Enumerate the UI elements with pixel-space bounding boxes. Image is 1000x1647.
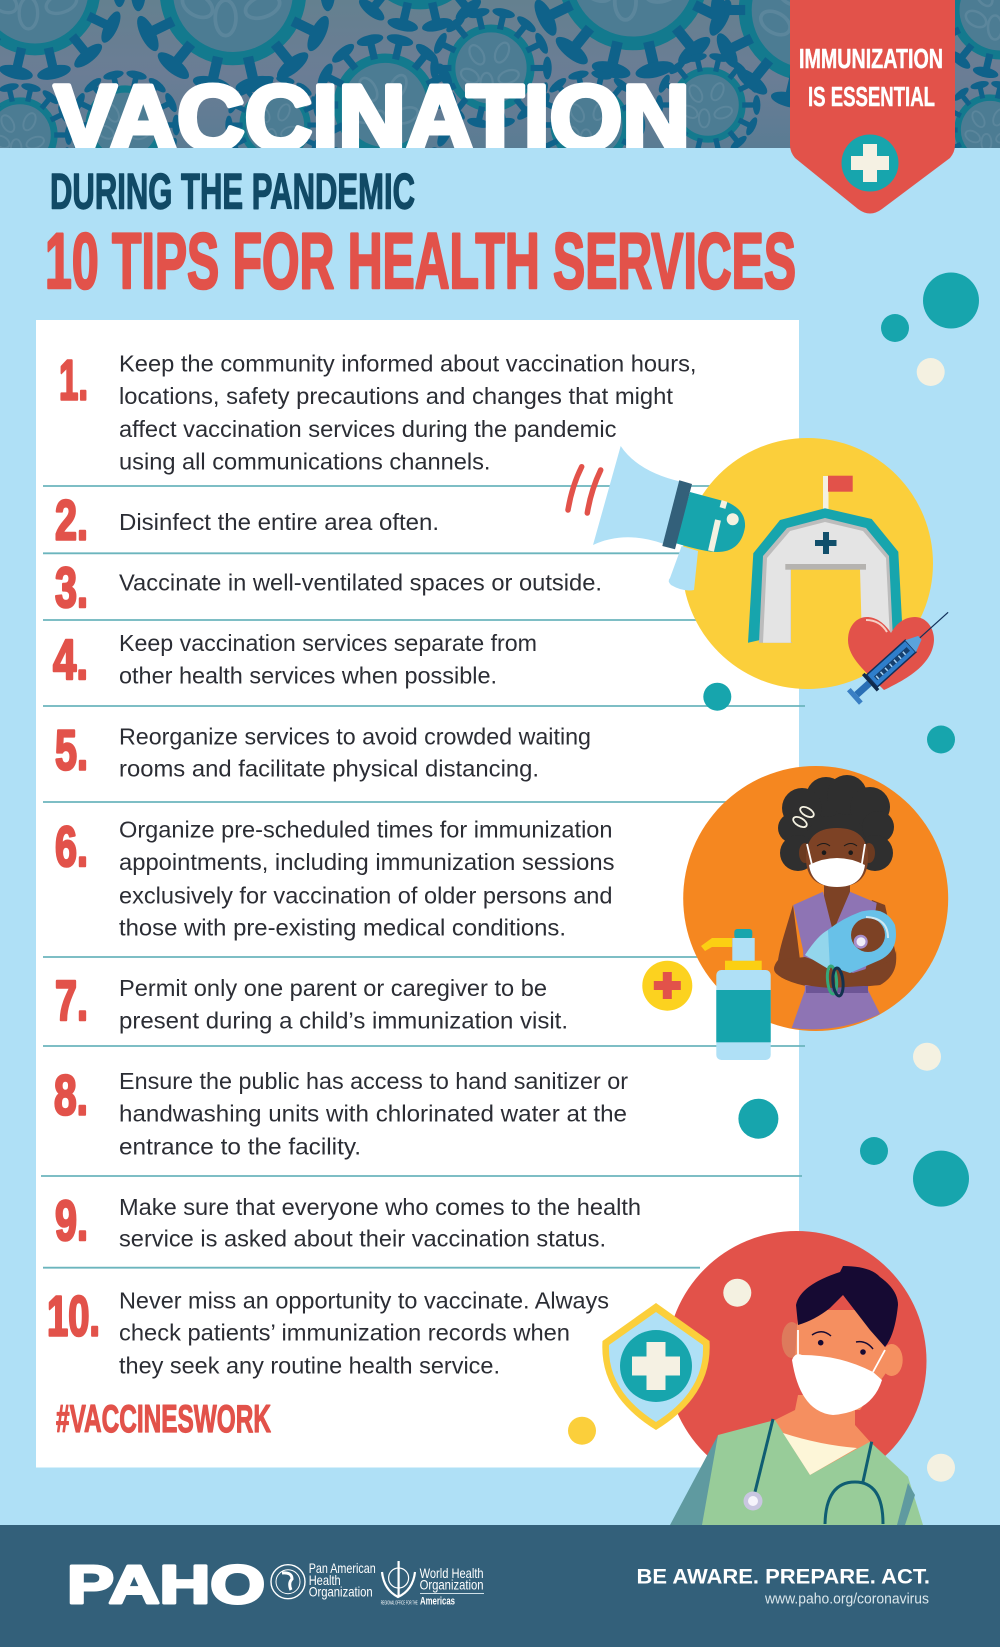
tip 5: rooms and facilitate physical distancing. [119, 756, 539, 782]
tip 8: 8. [54, 1064, 88, 1128]
tip 2: Disinfect the entire area often. [119, 509, 439, 535]
header band: virus pattern [0, 0, 1000, 148]
tip 7: present during a child’s immunization visit. [119, 1007, 568, 1033]
tip 1: affect vaccination services during the pandemic [119, 416, 616, 442]
tip 6: exclusively for vaccination of older persons and [119, 882, 612, 908]
tip 4: 4. [53, 628, 88, 692]
subtitle: during the pandemic: DURING THE PANDEMIC [50, 164, 415, 220]
illustration: field hospital on yellow circle [568, 438, 955, 706]
tip 10: check patients’ immunization records when [119, 1320, 570, 1346]
logo: WHO emblem [382, 1561, 415, 1597]
tip 1: using all communications channels. [119, 449, 490, 475]
title: vaccination: VACCINATION [54, 67, 690, 169]
icon: shield [602, 1303, 710, 1430]
icon: syringe [846, 604, 955, 706]
tip 6 [55, 815, 614, 941]
icon: tent building [748, 508, 903, 643]
tip 10: 10. [47, 1284, 100, 1348]
tip 4: other health services when possible. [119, 662, 497, 688]
tip 9 [55, 1189, 641, 1253]
text: Pan American Health Organization: Organization [309, 1584, 373, 1600]
face [799, 843, 811, 863]
ribbon badge: immunization is essential: IS ESSENTIAL [808, 81, 935, 112]
footer band [0, 1525, 1000, 1647]
tip 10: Never miss an opportunity to vaccinate. Always [119, 1287, 609, 1313]
panel: tips list [36, 320, 805, 1468]
mask [809, 858, 865, 887]
tip 3: 3. [55, 556, 88, 620]
decorative dots [703, 272, 979, 1207]
baby [805, 910, 896, 973]
tip 4: Keep vaccination services separate from [119, 630, 537, 656]
icon: hand sanitizer [701, 929, 771, 1060]
tip 7: 7. [55, 969, 88, 1033]
icon: plus badge [642, 961, 692, 1011]
logo: PAHO emblem [271, 1565, 305, 1599]
woman [774, 775, 896, 1029]
text: Pan American Health Organization: Pan American [309, 1560, 376, 1576]
tip 7: Permit only one parent or caregiver to be [119, 975, 547, 1001]
tip 5: 5. [55, 718, 88, 782]
text: Pan American Health Organization: Health [309, 1572, 341, 1588]
tip 1 [59, 348, 696, 475]
text: slogan: BE AWARE. PREPARE. ACT. [636, 1566, 930, 1588]
tip 5 [55, 718, 591, 782]
tip 1: 1. [59, 348, 88, 412]
tip 10: they seek any routine health service. [119, 1352, 500, 1378]
nurse [670, 1266, 923, 1525]
text: World Health Organization Americas: REGIONAL OFFICE FOR THE [381, 1600, 418, 1606]
tip 9: 9. [55, 1189, 88, 1253]
ribbon badge: immunization is essential [790, 0, 955, 214]
illustration: mother with baby on orange circle [642, 766, 948, 1060]
tip 9: service is asked about their vaccination status. [119, 1226, 606, 1252]
tip 7 [55, 969, 568, 1033]
tip 5: Reorganize services to avoid crowded waiting [119, 723, 591, 749]
bracelets [826, 966, 838, 994]
tip 1: locations, safety precautions and changes that might [119, 383, 674, 409]
tip 8 [54, 1064, 628, 1159]
tip 4 [53, 628, 537, 692]
tip 9: Make sure that everyone who comes to the health [119, 1194, 641, 1220]
tip 8: entrance to the facility. [119, 1133, 361, 1159]
logo: PAHO wordmark: PAHO [67, 1555, 265, 1615]
tip 8: Ensure the public has access to hand sanitizer or [119, 1068, 628, 1094]
tip 6: 6. [55, 815, 88, 879]
text: World Health Organization Americas: Organization [420, 1576, 484, 1592]
tip 6: Organize pre-scheduled times for immunization [119, 817, 612, 843]
tip 6: those with pre-existing medical conditions. [119, 915, 566, 941]
tip 8: handwashing units with chlorinated water at the [119, 1101, 627, 1127]
illustration: nurse on red circle [568, 1231, 955, 1525]
tip 1: Keep the community informed about vaccination hours, [119, 351, 696, 377]
text: website: www.paho.org/coronavirus [764, 1590, 929, 1608]
tip 3: Vaccinate in well-ventilated spaces or outside. [119, 570, 602, 596]
text: World Health Organization Americas: Americas [420, 1596, 455, 1608]
text: World Health Organization Americas: World Health [420, 1565, 484, 1581]
icon: heart [848, 617, 934, 690]
tip 2: 2. [55, 488, 88, 552]
dress [793, 892, 877, 990]
icon: flag [823, 476, 853, 509]
text: Pan American Health Organization [309, 1560, 376, 1600]
hashtag: #VACCINESWORK [56, 1398, 271, 1441]
icon: megaphone [568, 446, 745, 590]
text: World Health Organization Americas [381, 1565, 484, 1608]
arms [777, 900, 896, 990]
tip 6: appointments, including immunization sessions [119, 849, 614, 875]
tip 2 [55, 488, 439, 552]
tip 10 [47, 1284, 609, 1378]
ribbon badge: immunization is essential: IMMUNIZATION [799, 43, 943, 74]
tip 3 [55, 556, 602, 620]
